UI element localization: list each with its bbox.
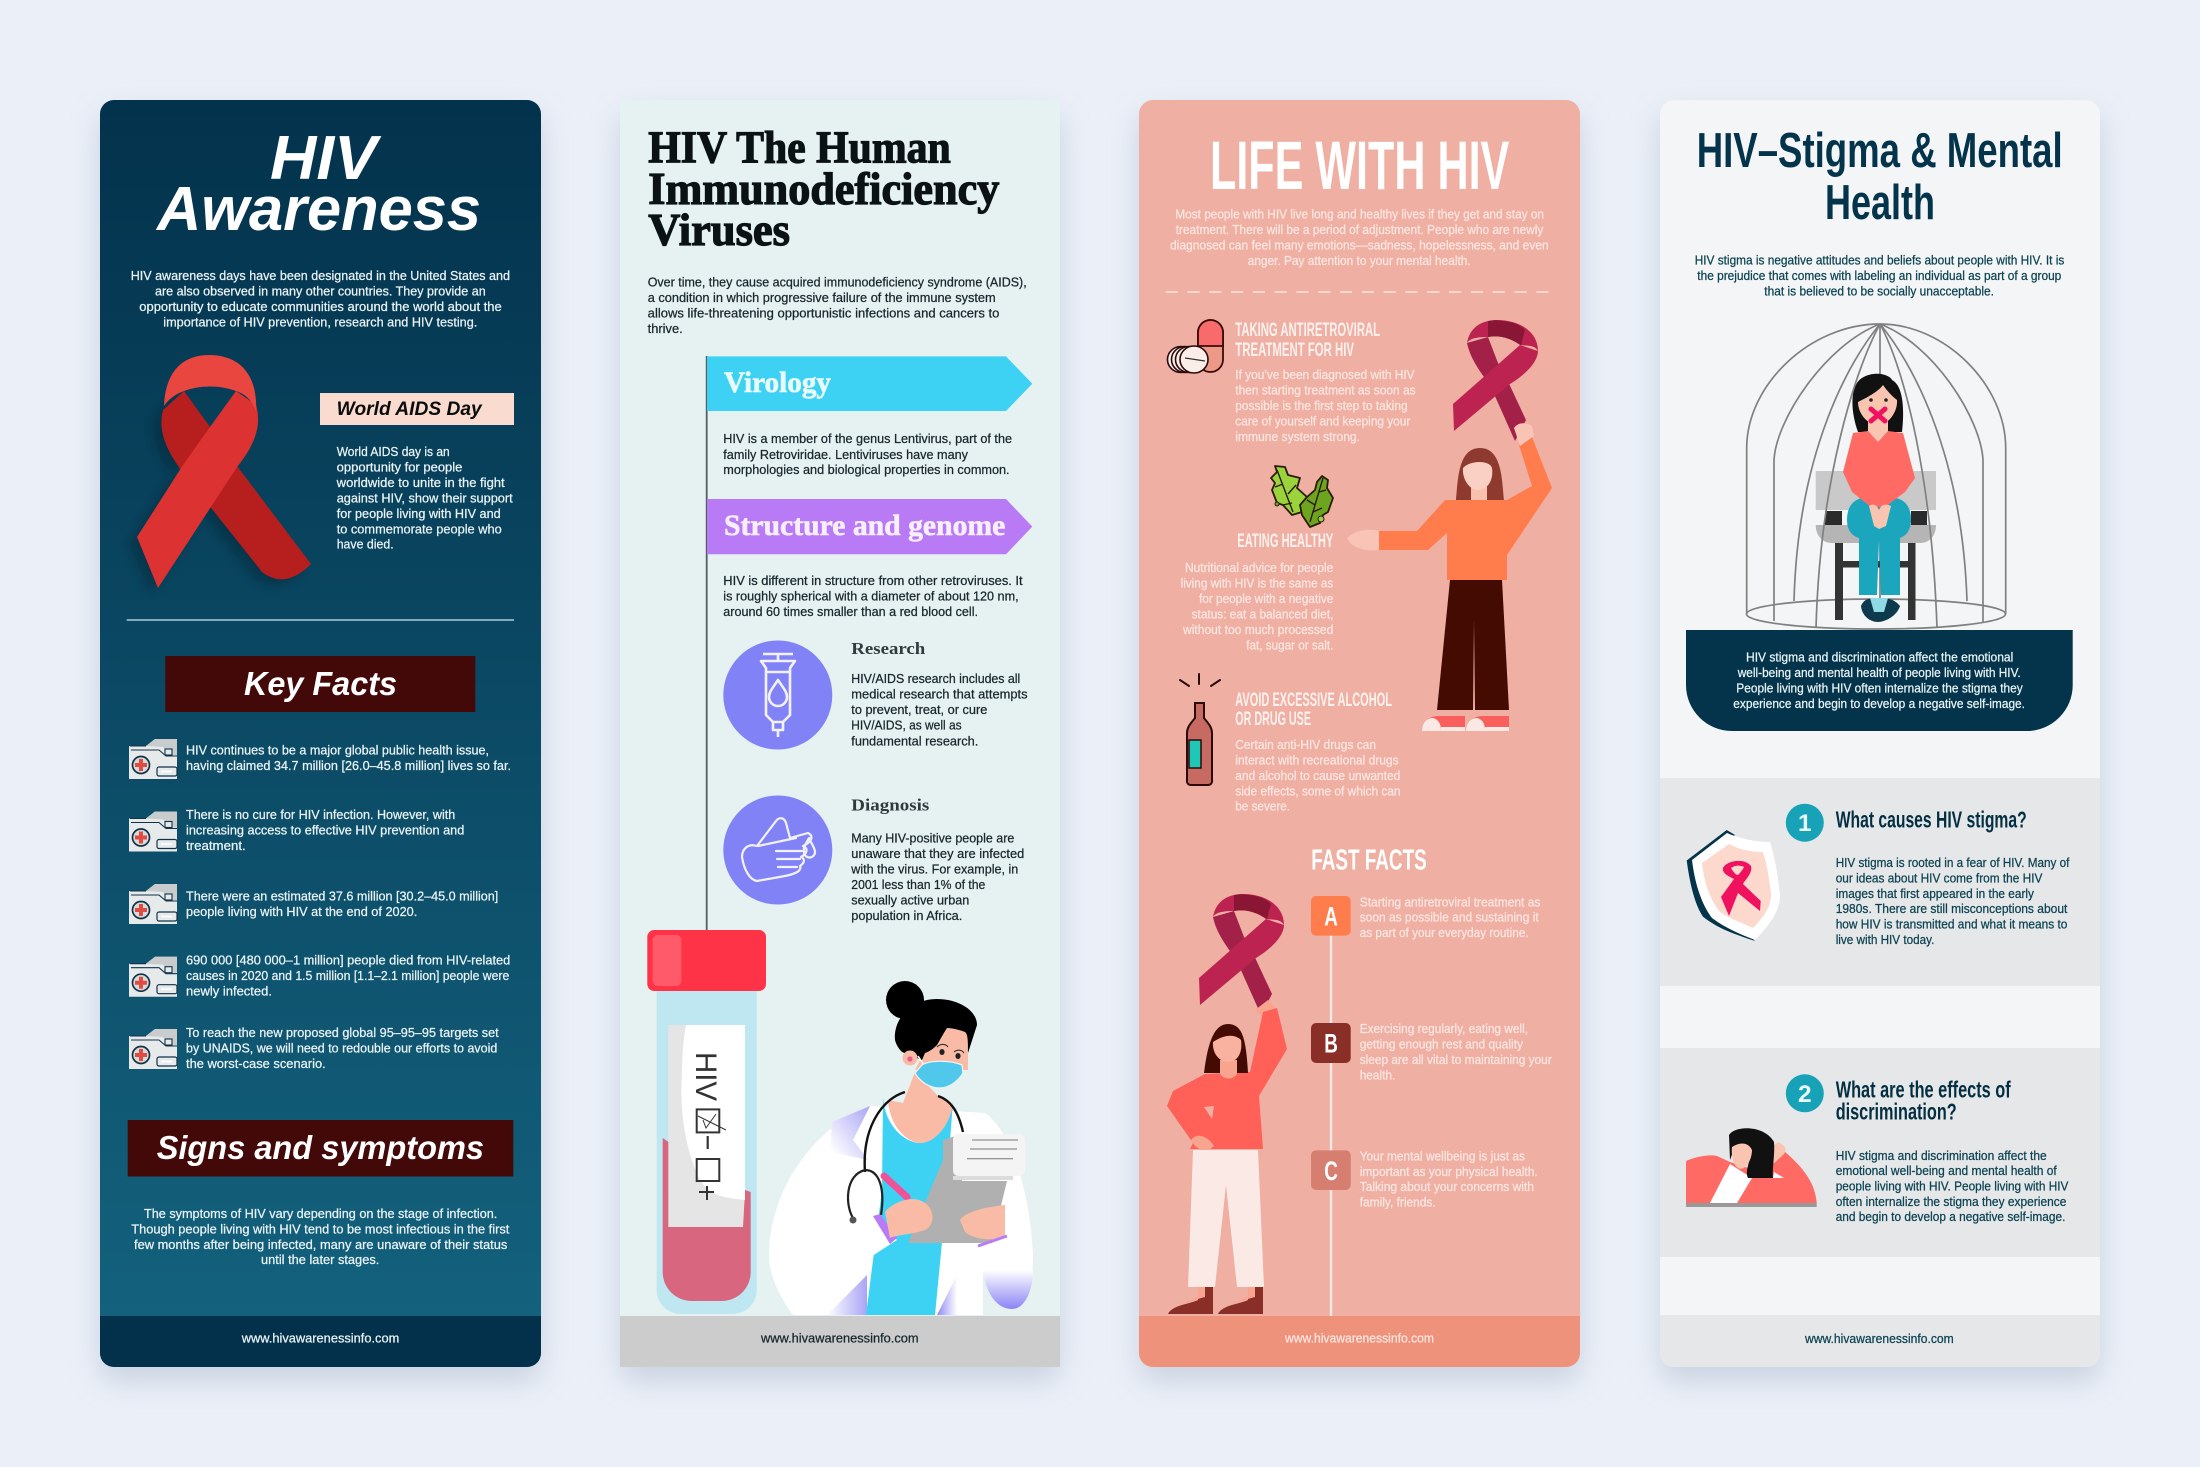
arrow: Virology [707, 356, 1032, 411]
Diagnosis: Many HIV-positive people are [851, 831, 1014, 846]
illustration: blood test tube: HIV [689, 1052, 722, 1101]
icon: hand with drop circle [723, 796, 832, 904]
fast fact B: getting enough rest and quality [1360, 1036, 1524, 1052]
intro text: are also observed in many other countries. They provide an [155, 284, 486, 298]
symptoms text [131, 1206, 510, 1267]
What causes HIV stigma: how HIV is transmitted and what it means to [1836, 917, 2067, 932]
What causes HIV stigma: live with HIV today. [1836, 932, 1934, 947]
panel footer [620, 1316, 1060, 1367]
intro text: the prejudice that comes with labeling an individual as part of a group [1697, 268, 2061, 283]
World AIDS Day text: worldwide to unite in the fight [336, 475, 505, 490]
What are the effects of discrimination: emotional well-being and mental health of [1836, 1163, 2057, 1178]
Research: fundamental research. [851, 733, 978, 748]
intro text: Most people with HIV live long and healthy lives if they get and stay on [1175, 206, 1544, 221]
panel: HIV Awareness [100, 100, 541, 1367]
fast fact B [1311, 1021, 1552, 1082]
Avoid excessive alcohol: Certain anti-HIV drugs can [1235, 737, 1376, 752]
callout: dark text box: People living with HIV often internalize the stigma they [1736, 680, 2023, 696]
title: HIV–Stigma & Mental [1697, 124, 2063, 178]
key fact 2 [129, 807, 464, 853]
fast fact A: soon as possible and sustaining it [1360, 910, 1539, 925]
Structure text [723, 573, 1023, 619]
icon: leaves [1271, 466, 1333, 527]
panel: Life with HIV [1139, 100, 1580, 1367]
World AIDS Day text: to commemorate people who [337, 521, 502, 536]
illustration: doctor [769, 981, 1033, 1315]
key fact 5 [129, 1025, 499, 1071]
icon: bottle [1180, 674, 1220, 785]
key fact 4: causes in 2020 and 1.5 million [1.1–2.1 million] people were [186, 968, 509, 983]
Avoid excessive alcohol: interact with recreational drugs [1235, 753, 1399, 768]
intro text: opportunity to educate communities around the world about the [139, 299, 502, 314]
icon: red ribbon [129, 355, 311, 594]
intro text: HIV awareness days have been designated in the United States and [131, 268, 510, 283]
Taking antiretroviral treatment: TAKING ANTIRETROVIRAL [1235, 320, 1380, 341]
title: Health [1825, 176, 1935, 230]
Taking antiretroviral treatment: TREATMENT FOR HIV [1235, 340, 1354, 361]
key fact 4: newly infected. [186, 984, 272, 999]
What are the effects of discrimination: discrimination? [1836, 1099, 1957, 1125]
symptoms text: Though people living with HIV tend to be most infectious in the first [131, 1221, 510, 1236]
What are the effects of discrimination: people living with HIV. People living with HIV [1836, 1178, 2069, 1193]
Avoid excessive alcohol: side effects, some of which can [1235, 783, 1401, 798]
World AIDS Day text [336, 444, 513, 552]
Diagnosis: unaware that they are infected [851, 846, 1024, 861]
intro text: thrive. [648, 321, 683, 336]
What are the effects of discrimination: What are the effects of [1836, 1076, 2011, 1102]
key fact 1: having claimed 34.7 million [26.0–45.8 million] lives so far. [186, 758, 511, 773]
band: causes background [1660, 778, 2100, 986]
symptoms text: until the later stages. [261, 1252, 379, 1267]
Diagnosis: with the virus. For example, in [850, 862, 1018, 876]
key fact 3: There were an estimated 37.6 million [30.2–45.0 million] [186, 888, 498, 903]
Taking antiretroviral treatment: If you’ve been diagnosed with HIV [1235, 367, 1415, 382]
Avoid excessive alcohol [1235, 690, 1401, 814]
fast fact B: Exercising regularly, eating well, [1360, 1021, 1528, 1036]
title: Viruses [648, 205, 790, 255]
Eating healthy: without too much processed [1182, 622, 1333, 637]
What causes HIV stigma: What causes HIV stigma? [1836, 806, 2027, 832]
fast fact B: health. [1360, 1067, 1395, 1082]
fast fact A: A [1324, 902, 1338, 932]
What are the effects of discrimination [1786, 1074, 2069, 1224]
panel footer [1139, 1316, 1580, 1367]
icon: shield with ribbon [1687, 830, 1780, 941]
intro text [648, 275, 1027, 336]
World AIDS Day text: have died. [337, 536, 394, 552]
Taking antiretroviral treatment: care of yourself and keeping your [1235, 413, 1411, 428]
Diagnosis: population in Africa. [851, 908, 962, 923]
Avoid excessive alcohol: OR DRUG USE [1235, 709, 1311, 730]
callout: dark text box [1686, 630, 2073, 731]
Research: HIV/AIDS, as well as [851, 718, 962, 733]
Virology text: family Retroviridae. Lentiviruses have many [723, 447, 969, 462]
Research: Research [851, 639, 926, 658]
fast fact A: as part of your everyday routine. [1360, 925, 1529, 940]
key fact 2: treatment. [186, 838, 246, 853]
fast fact C [1311, 1148, 1538, 1210]
Eating healthy: Nutritional advice for people [1185, 560, 1333, 575]
heading: World AIDS Day: World AIDS Day [337, 399, 483, 420]
key fact 2: increasing access to effective HIV prevention and [186, 823, 464, 838]
What are the effects of discrimination: 2 [1798, 1081, 1812, 1108]
What causes HIV stigma [1786, 804, 2070, 947]
illustration: woman head down [1686, 1128, 1817, 1207]
intro text: anger. Pay attention to your mental health. [1248, 253, 1471, 268]
Diagnosis: 2001 less than 1% of the [851, 877, 985, 892]
What are the effects of discrimination: often internalize the stigma they experience [1836, 1194, 2066, 1209]
key fact 3 [129, 884, 498, 924]
heading: Fast Facts: FAST FACTS [1311, 844, 1427, 876]
panel: HIV The Human Immunodeficiency Viruses [620, 100, 1060, 1367]
title [155, 124, 481, 244]
key facts list [129, 739, 511, 1071]
key fact 2: There is no cure for HIV infection. However, with [186, 807, 455, 822]
What are the effects of discrimination: and begin to develop a negative self-image. [1836, 1209, 2065, 1224]
intro text: allows life-threatening opportunistic infections and cancers to [648, 306, 999, 321]
fast fact C: family, friends. [1360, 1194, 1436, 1210]
fast fact C: important as your physical health. [1360, 1164, 1538, 1179]
fast fact C: C [1324, 1156, 1338, 1186]
Taking antiretroviral treatment [1235, 320, 1416, 444]
intro text: that is believed to be socially unacceptable. [1764, 284, 1994, 299]
icon: pills [1168, 320, 1223, 373]
What causes HIV stigma: images that first appeared in the early [1836, 886, 2035, 901]
Structure text: around 60 times smaller than a red blood cell. [723, 604, 978, 619]
panel footer: www.hivawarenessinfo.com [1284, 1330, 1434, 1346]
Avoid excessive alcohol: and alcohol to cause unwanted [1235, 768, 1400, 783]
Avoid excessive alcohol: AVOID EXCESSIVE ALCOHOL [1235, 690, 1392, 711]
fast fact B: sleep are all vital to maintaining your [1360, 1052, 1552, 1067]
illustration: woman in cage [1746, 324, 2006, 629]
band: effects background [1660, 1048, 2100, 1257]
key fact 1 [129, 739, 511, 779]
heading: Signs and symptoms: Signs and symptoms [157, 1129, 484, 1166]
intro text [131, 268, 510, 330]
Structure text: is roughly spherical with a diameter of about 120 nm, [723, 588, 1019, 603]
title: Awareness [155, 175, 481, 244]
key fact 5: To reach the new proposed global 95–95–95 targets set [186, 1025, 499, 1040]
World AIDS Day text: opportunity for people [337, 459, 462, 474]
Virology text [723, 431, 1012, 477]
heading: Key Facts [165, 656, 475, 712]
panel: HIV Stigma and Mental Health [1660, 100, 2100, 1367]
Virology text: morphologies and biological properties in common. [723, 462, 1010, 477]
World AIDS Day text: World AIDS day is an [337, 444, 450, 459]
panel footer [100, 1316, 541, 1367]
Diagnosis: Diagnosis [851, 796, 930, 814]
key fact 5: by UNAIDS, we will need to redouble our efforts to avoid [186, 1040, 497, 1055]
illustration: woman holding ribbon, fast facts [1167, 894, 1287, 1314]
icon: IV bag circle [723, 640, 832, 750]
heading: World AIDS Day [320, 393, 514, 425]
callout: dark text box: HIV stigma and discrimination affect the emotional [1746, 650, 2013, 665]
fast fact A [1311, 894, 1540, 940]
title [648, 123, 1000, 255]
Taking antiretroviral treatment: then starting treatment as soon as [1235, 382, 1416, 397]
fast fact C: Your mental wellbeing is just as [1360, 1148, 1525, 1163]
arrow: Structure and genome: Structure and genome [724, 509, 1005, 542]
key fact 4: 690 000 [480 000–1 million] people died from HIV-related [186, 952, 510, 967]
Avoid excessive alcohol: be severe. [1235, 799, 1290, 814]
What causes HIV stigma: HIV stigma is rooted in a fear of HIV. Many of [1836, 855, 2070, 870]
illustration: woman with ribbon [1347, 320, 1552, 731]
panel footer: www.hivawarenessinfo.com [241, 1330, 399, 1346]
illustration: blood test tube [647, 930, 766, 1314]
fast fact B: B [1324, 1028, 1338, 1058]
Eating healthy: fat, sugar or salt. [1246, 637, 1333, 652]
heading: Signs and symptoms [128, 1120, 513, 1176]
Eating healthy [1181, 531, 1333, 652]
key fact 1: HIV continues to be a major global public health issue, [186, 743, 489, 758]
callout: dark text box: well-being and mental health of people living with HIV. [1737, 665, 2021, 680]
arrow: Virology: Virology [724, 366, 831, 399]
panel footer: www.hivawarenessinfo.com [1804, 1331, 1954, 1346]
key fact 3: people living with HIV at the end of 2020. [186, 904, 417, 919]
fast fact C: Talking about your concerns with [1360, 1179, 1534, 1194]
intro text: treatment. There will be a period of adjustment. People who are newly [1176, 222, 1544, 237]
Research: medical research that attempts [851, 687, 1028, 702]
World AIDS Day text: against HIV, show their support [337, 490, 513, 505]
Taking antiretroviral treatment: possible is the first step to taking [1235, 398, 1408, 413]
intro text: diagnosed can feel many emotions—sadness, hopelessness, and even [1170, 237, 1549, 252]
title: LIFE WITH HIV [1210, 127, 1509, 204]
intro text [1170, 206, 1549, 268]
fast fact A: Starting antiretroviral treatment as [1360, 894, 1540, 909]
callout: dark text box: experience and begin to develop a negative self-image. [1733, 696, 2025, 711]
arrow: Structure and genome [707, 499, 1032, 554]
Research [851, 639, 1028, 748]
key fact 5: the worst-case scenario. [186, 1056, 326, 1071]
What causes HIV stigma: 1 [1798, 810, 1812, 837]
World AIDS Day text: for people living with HIV and [337, 506, 501, 521]
symptoms text: The symptoms of HIV vary depending on the stage of infection. [144, 1206, 497, 1221]
intro text: HIV stigma is negative attitudes and beliefs about people with HIV. It is [1695, 252, 2064, 267]
panel footer [1660, 1315, 2100, 1367]
heading: Key Facts: Key Facts [244, 665, 397, 702]
What are the effects of discrimination: HIV stigma and discrimination affect the [1836, 1148, 2047, 1163]
symptoms text: few months after being infected, many are unaware of their status [134, 1237, 507, 1252]
Structure text: HIV is different in structure from other retroviruses. It [723, 573, 1023, 588]
intro text: Over time, they cause acquired immunodeficiency syndrome (AIDS), [648, 275, 1027, 290]
Virology text: HIV is a member of the genus Lentivirus, part of the [723, 431, 1012, 446]
Eating healthy: EATING HEALTHY [1237, 531, 1333, 552]
intro text: a condition in which progressive failure of the immune system [648, 290, 996, 305]
Eating healthy: status: eat a balanced diet, [1192, 607, 1333, 622]
What causes HIV stigma: our ideas about HIV come from the HIV [1836, 870, 2043, 886]
Research: HIV/AIDS research includes all [851, 671, 1020, 686]
title [1697, 124, 2063, 230]
title: HIV The Human [648, 123, 951, 173]
Eating healthy: living with HIV is the same as [1181, 576, 1333, 591]
title: Immunodeficiency [648, 164, 1000, 214]
Diagnosis [850, 796, 1024, 923]
panel footer: www.hivawarenessinfo.com [760, 1330, 919, 1346]
Eating healthy: for people with a negative [1199, 591, 1333, 606]
Taking antiretroviral treatment: immune system strong. [1235, 429, 1360, 444]
intro text [1695, 252, 2064, 299]
What causes HIV stigma: 1980s. There are still misconceptions about [1836, 901, 2068, 916]
Diagnosis: sexually active urban [851, 893, 969, 908]
intro text: importance of HIV prevention, research and HIV testing. [163, 314, 477, 330]
Research: to prevent, treat, or cure [851, 702, 987, 717]
key fact 4 [129, 952, 510, 999]
title: HIV [270, 124, 382, 193]
